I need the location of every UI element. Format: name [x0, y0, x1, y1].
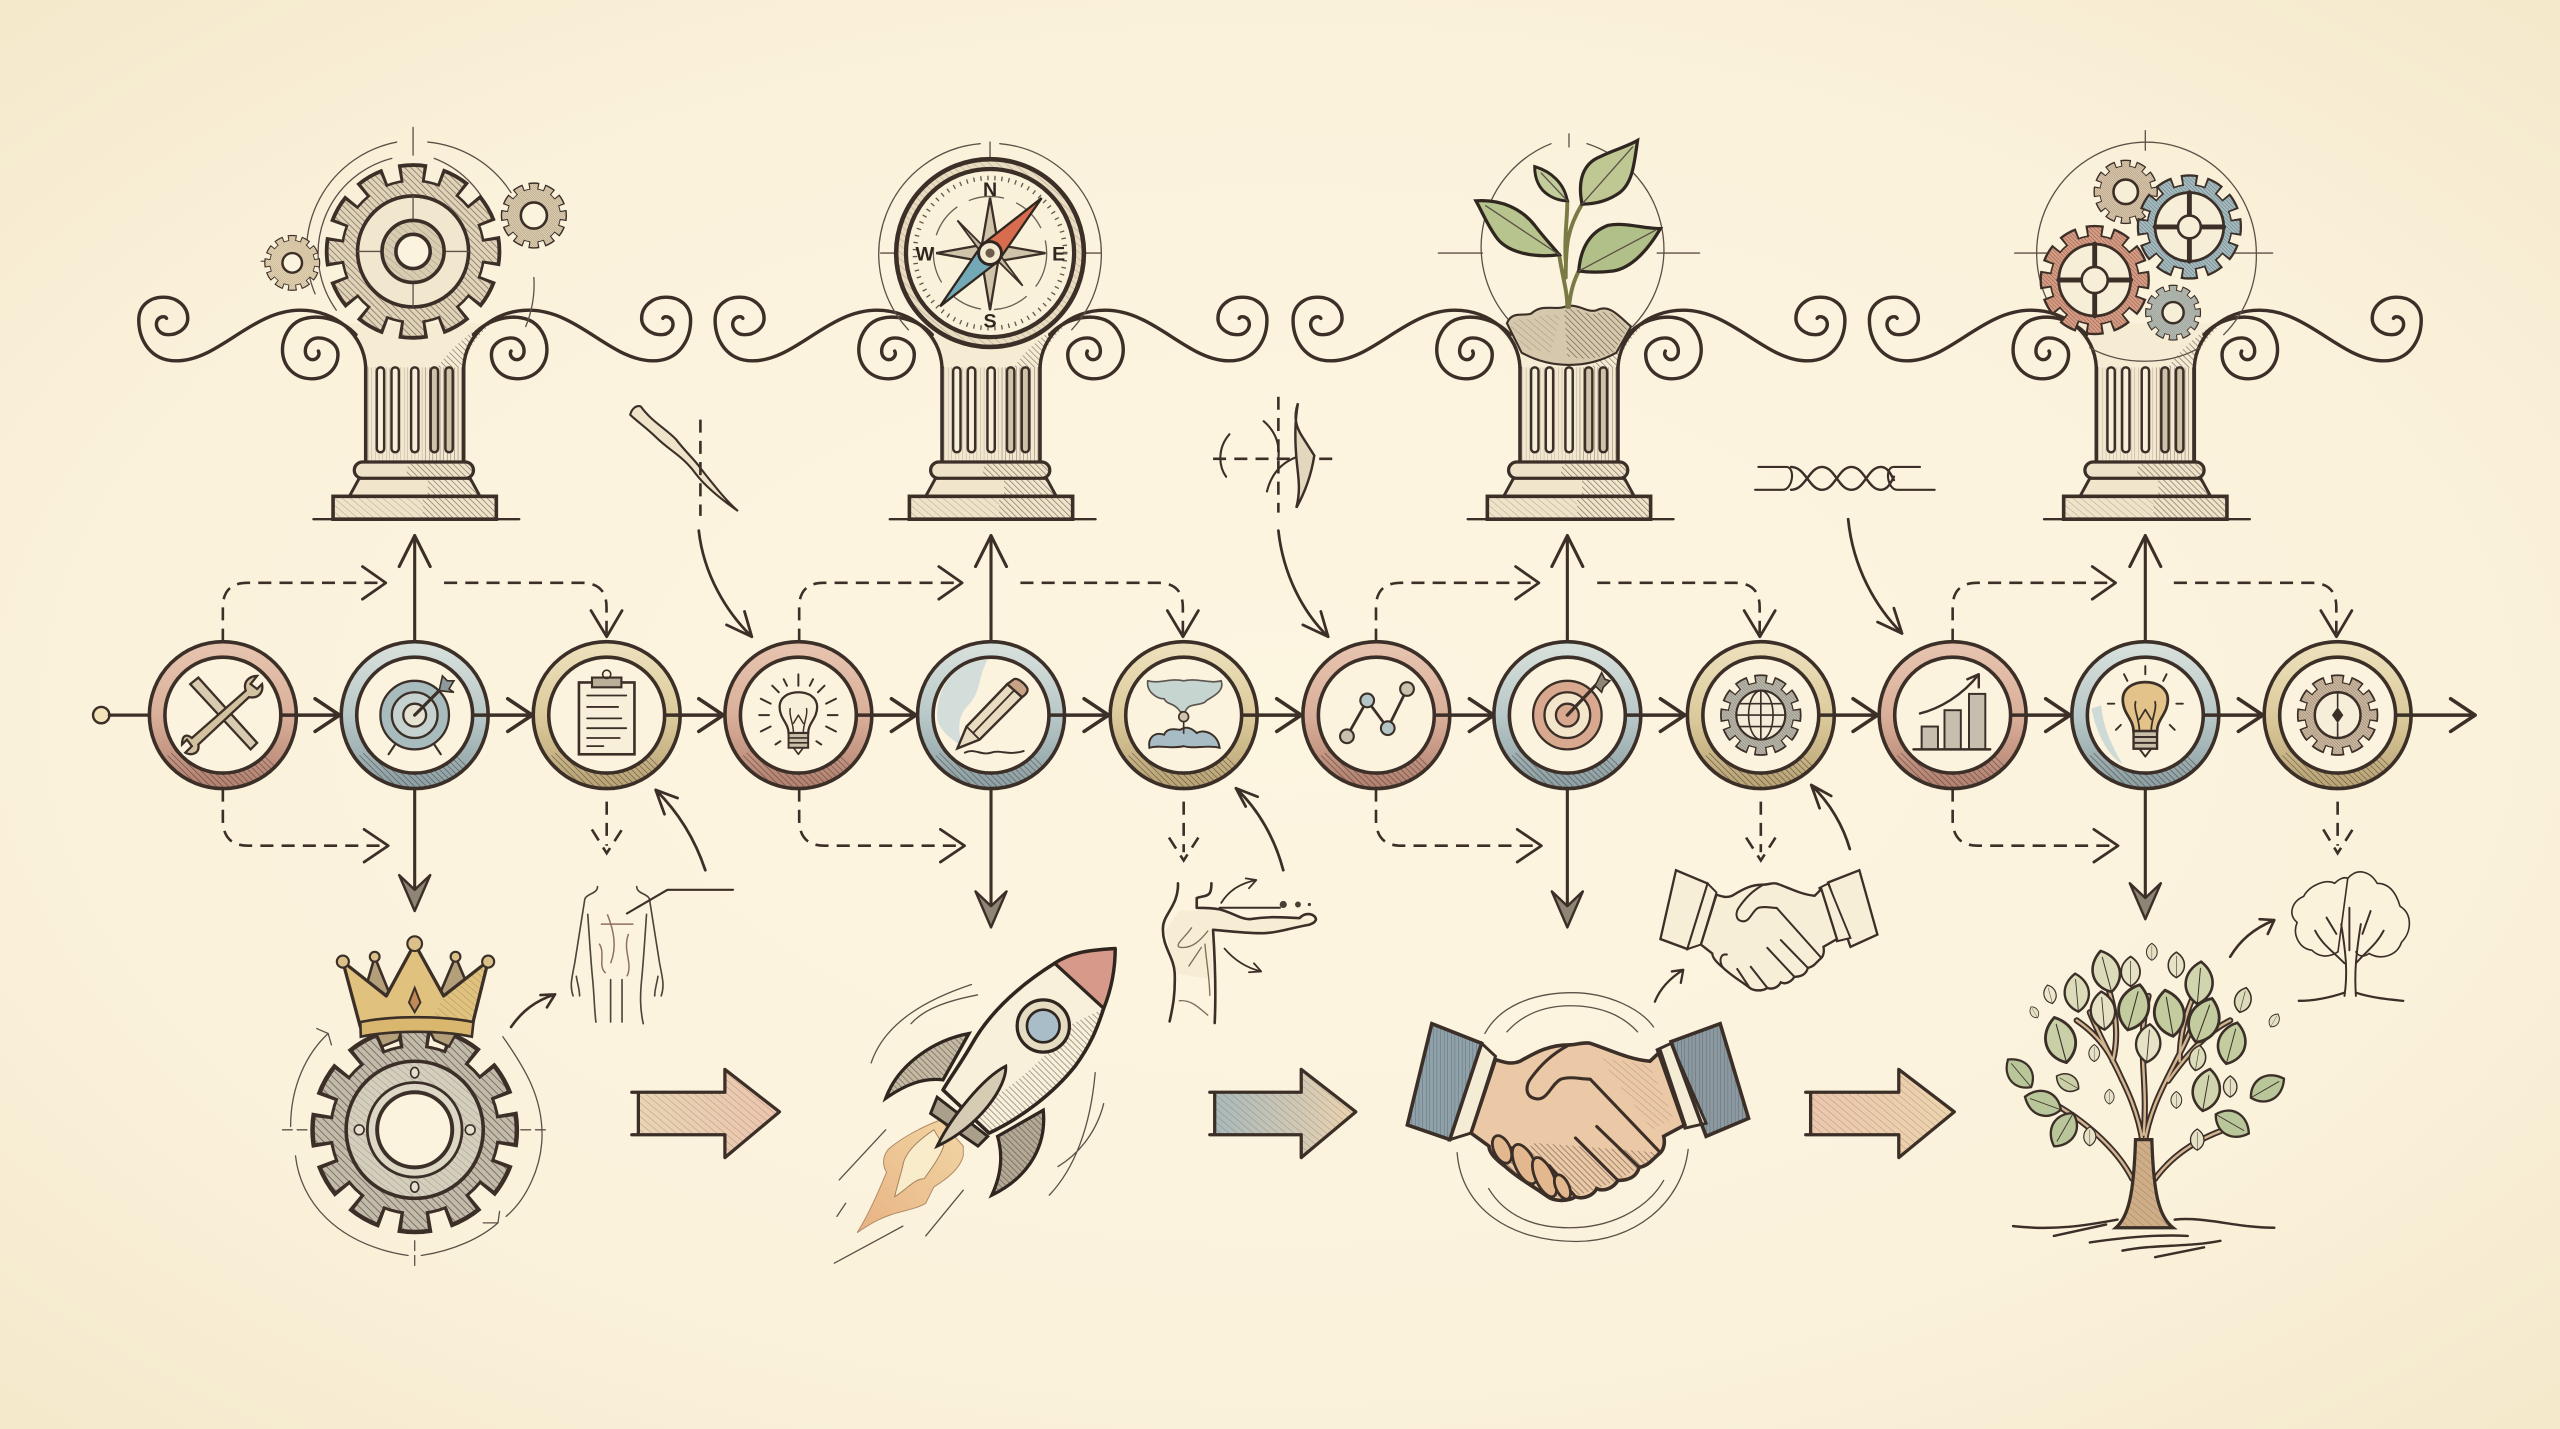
leaf: top large	[1580, 140, 1638, 204]
node 3: clipboard	[533, 642, 680, 789]
vertical arrow up to pillar 2	[976, 536, 1007, 642]
right fin	[992, 1110, 1044, 1195]
construction circle	[2015, 131, 2273, 361]
vertical arrow down to outcome 3	[1552, 789, 1583, 927]
leaf: left	[1476, 201, 1559, 256]
node 10: bar chart	[1879, 642, 2026, 789]
icon: golden lightbulb	[2108, 666, 2183, 757]
column and scrolls	[1293, 297, 1845, 519]
needle	[982, 198, 1042, 261]
compass rose	[936, 198, 1046, 310]
icon: large gear	[336, 174, 490, 329]
icon: small gear right	[505, 187, 563, 244]
compass letters: N	[983, 179, 997, 201]
outcome 2: rocket	[834, 949, 1115, 1263]
rotation arcs	[282, 1029, 547, 1267]
vertical arrow up to pillar 1	[399, 536, 430, 642]
icon: wrench and screwdriver	[182, 676, 262, 754]
dashed branch connectors: group 2	[799, 567, 1198, 862]
block arrow 2	[1210, 1069, 1356, 1158]
node 2: target	[341, 642, 488, 789]
centre fin	[937, 1066, 1006, 1146]
dashed branch connectors: group 3	[1376, 567, 1775, 862]
sketch: human body	[571, 887, 733, 1024]
curved arrow: bow to node 7	[1278, 531, 1328, 637]
flow arrows along the main line	[296, 699, 2475, 731]
sketch: bow shape between pillars 2 and 3	[1213, 397, 1334, 513]
small arrow: tree to small tree	[2230, 919, 2274, 957]
short dashed arrow below node 9	[1746, 802, 1776, 860]
lower fingers	[1488, 1133, 1574, 1202]
vertical arrow down to outcome 4	[2130, 789, 2161, 919]
outcome 1: crowned gear	[282, 936, 547, 1267]
construction circle	[879, 142, 1101, 330]
icon: compass	[879, 142, 1101, 347]
column and scrolls	[1869, 297, 2421, 519]
left fin	[886, 1033, 969, 1098]
arcs around handshake	[1457, 993, 1688, 1241]
node 9: globe gear	[1687, 642, 1834, 789]
compass letters: W	[915, 243, 934, 265]
construction circle	[1438, 134, 1700, 327]
dashed branch connectors: group 4	[1953, 567, 2352, 862]
vertical arrow down to outcome 1	[399, 789, 430, 911]
node 5: pencil	[918, 642, 1064, 789]
icon: seedling	[1476, 140, 1660, 307]
node 6: hourglass of clouds	[1110, 642, 1257, 789]
icon: small gear left	[268, 238, 317, 287]
tree branches	[2041, 984, 2233, 1179]
curved arrow: arm sketch to node 6	[1236, 788, 1283, 870]
watercolour wash	[2091, 705, 2122, 764]
curved arrow: quill to node 4	[699, 531, 752, 637]
short dashed arrow below node 3	[592, 802, 622, 853]
sketch: quill between pillars 1 and 2	[630, 406, 738, 516]
node 7: line chart	[1303, 642, 1450, 789]
icon: lightbulb with rays	[759, 674, 838, 754]
node 1: tools	[149, 642, 296, 789]
watercolour wash	[937, 660, 988, 748]
outcome 4: growing tree	[1999, 943, 2290, 1257]
outcome 3: handshake	[1407, 993, 1749, 1241]
icon: large gear	[323, 1038, 506, 1221]
sketch: DNA strand between pillars 3 and 4	[1755, 467, 1935, 490]
short dashed arrow below node 6	[1169, 802, 1198, 860]
icon: pencil	[957, 679, 1028, 753]
sketch: small tree	[2292, 872, 2409, 1001]
icon: red gear	[2046, 232, 2143, 328]
small arrow: handshake to sketch	[1655, 970, 1683, 1002]
vertical arrow up to pillar 4	[2130, 536, 2161, 642]
curved arrow: DNA to node 10	[1848, 519, 1902, 633]
construction arcs around gear	[261, 127, 534, 327]
icon: small grey gear	[2149, 288, 2198, 337]
hand fills	[1407, 1024, 1749, 1200]
vertical arrow down to outcome 2	[976, 789, 1007, 927]
pillar 4: column with coloured gears	[1869, 131, 2421, 519]
icon: tan gear	[2097, 164, 2154, 220]
icon: cloud hourglass	[1148, 680, 1222, 748]
column and scrolls	[715, 297, 1267, 519]
icon: connected data points	[1340, 682, 1414, 743]
sketch: arm and torso	[1163, 878, 1316, 1023]
tree trunk	[2116, 1140, 2173, 1228]
compass letters: S	[984, 310, 997, 332]
icon: rising bars with arrow	[1913, 674, 1990, 749]
curved arrow: handshake sketch to node 9	[1811, 785, 1850, 849]
body hatching	[967, 1008, 1104, 1133]
compass letters: E	[1052, 243, 1065, 265]
icon: gear with compass centre	[2302, 679, 2373, 751]
ground and roots	[2013, 1219, 2274, 1257]
vertical arrow up to pillar 3	[1552, 536, 1583, 642]
hand outlines	[1407, 1024, 1749, 1200]
pillar 3: column with seedling	[1293, 134, 1845, 519]
node 4: lightbulb	[725, 642, 872, 789]
motion lines	[834, 984, 1104, 1263]
sketch: small handshake	[1660, 870, 1877, 990]
icon: crown	[337, 936, 494, 1047]
curved arrow: body sketch to node 3	[656, 790, 705, 870]
icon: globe inside gear	[1725, 679, 1796, 751]
tree leaves	[1999, 943, 2290, 1152]
nose cone	[1055, 949, 1115, 1008]
soil mound	[1507, 306, 1631, 365]
rocket nozzle	[931, 1097, 988, 1146]
start marker	[93, 707, 150, 723]
flame	[857, 1120, 963, 1233]
block arrow 3	[1806, 1069, 1954, 1158]
rocket body	[943, 949, 1115, 1133]
short dashed arrow below node 12	[2323, 802, 2353, 853]
icon: blue gear	[2143, 181, 2235, 273]
small arrow: crowned gear to body sketch	[511, 994, 555, 1027]
dashed branch connectors: group 1	[223, 567, 622, 862]
column and scrolls	[139, 297, 691, 519]
node 8: target	[1494, 642, 1641, 789]
window	[1017, 1000, 1069, 1052]
pillar 2: column with compass	[715, 142, 1267, 519]
icon: blue target	[380, 676, 454, 754]
compass letters	[915, 179, 1065, 332]
leaf: right	[1579, 224, 1660, 272]
icon: clipboard	[579, 670, 634, 754]
node 12: gear	[2264, 642, 2411, 789]
block arrow 1	[632, 1069, 779, 1158]
leaf: top small	[1535, 167, 1567, 201]
node 11: lightbulb	[2072, 642, 2219, 789]
icon: red target	[1533, 673, 1610, 749]
pillar 1: column with gears	[139, 127, 691, 519]
